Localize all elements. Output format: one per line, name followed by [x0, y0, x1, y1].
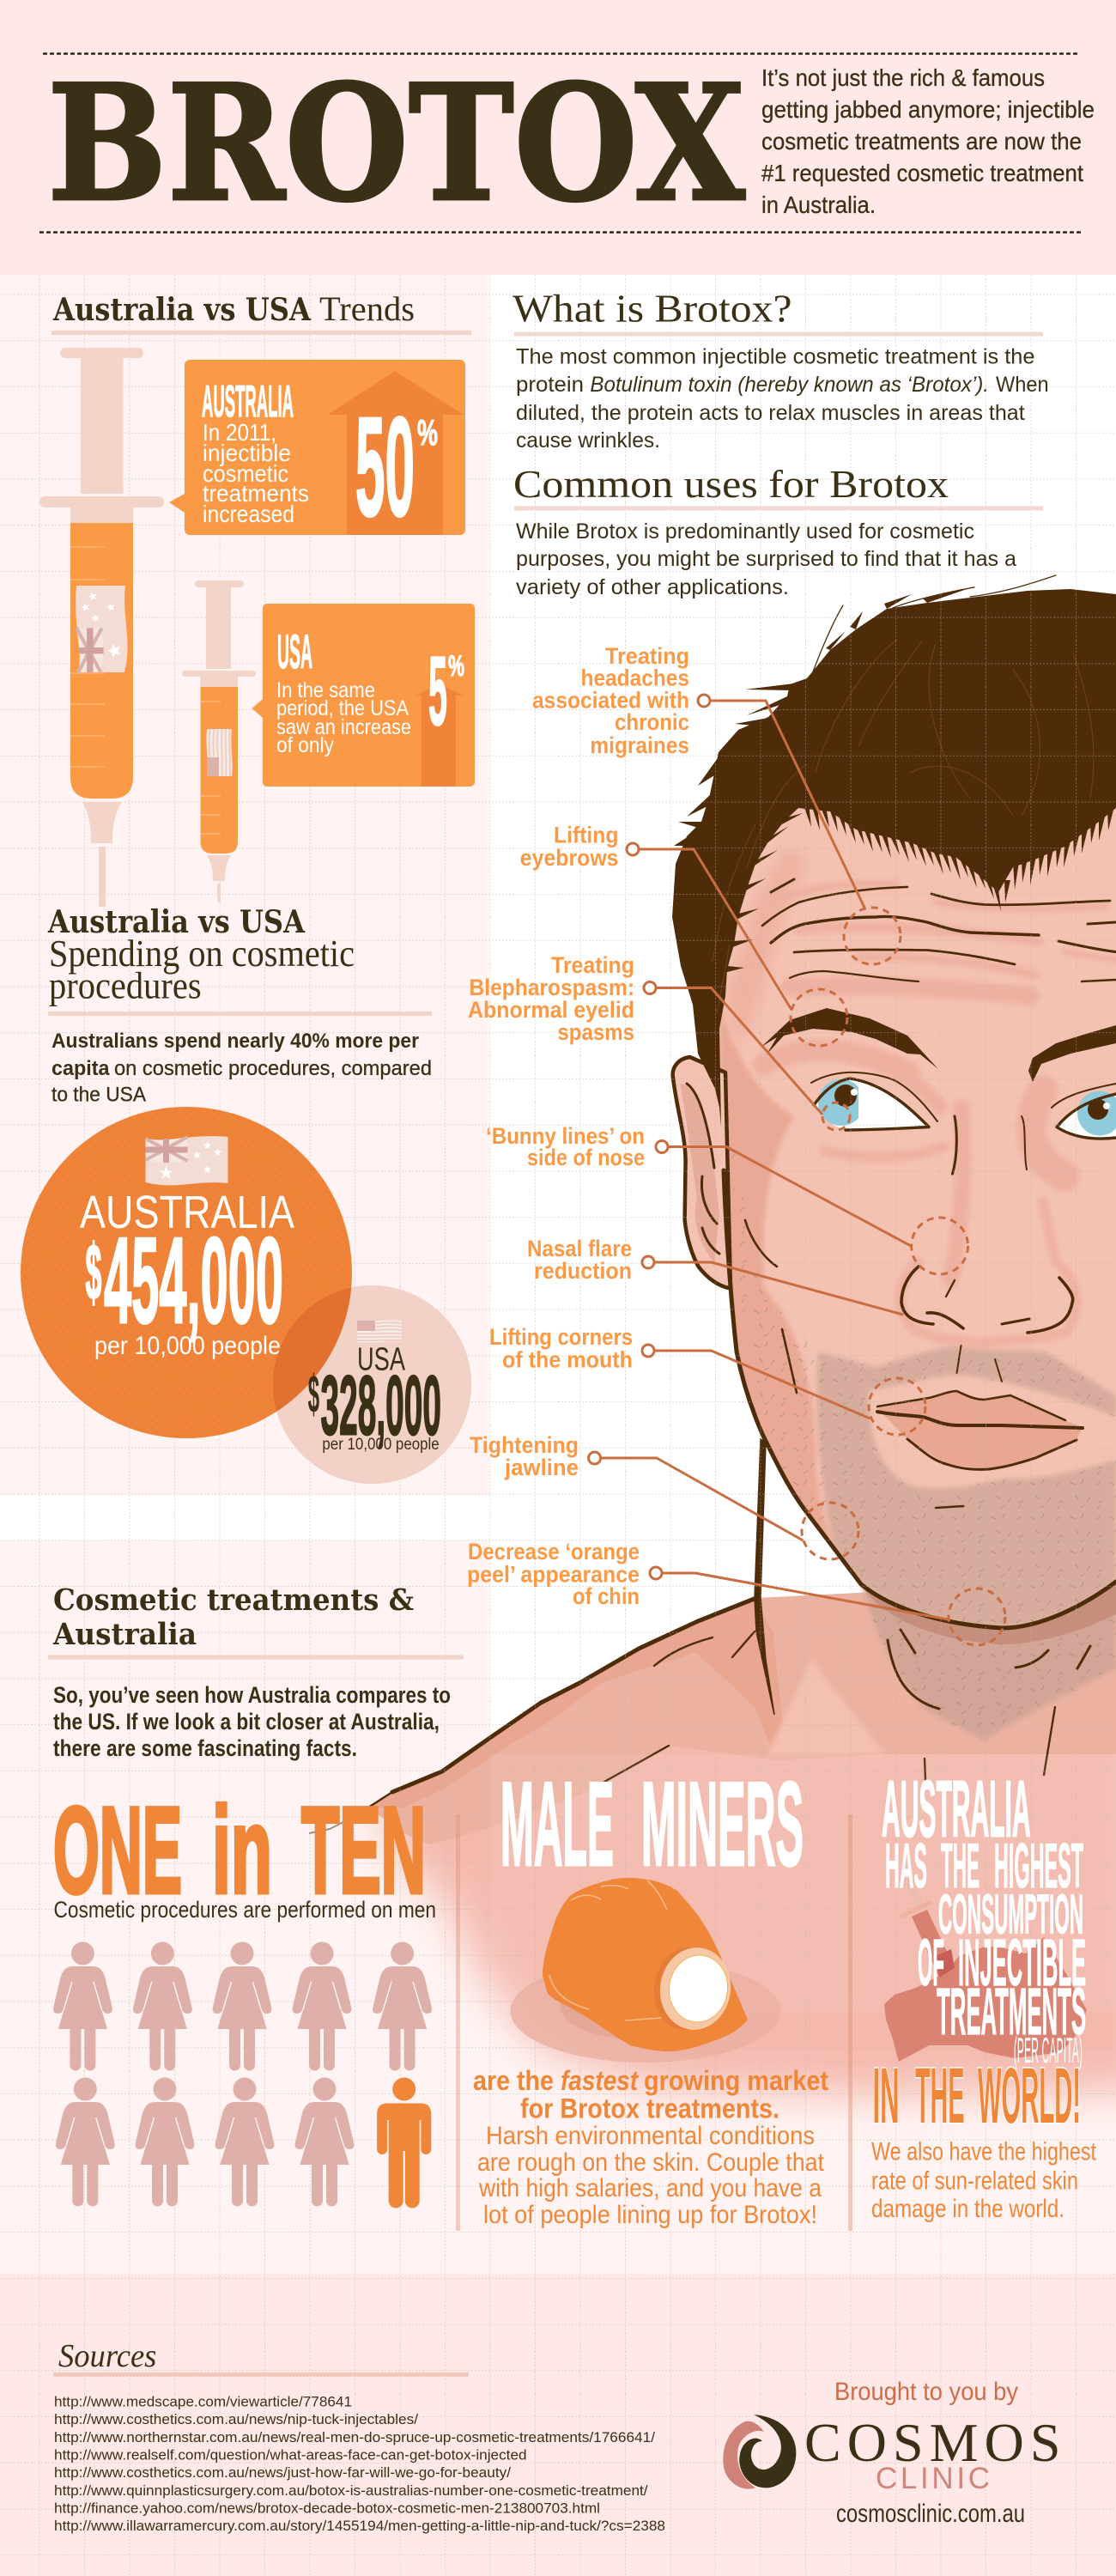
callout: bunny lines: side of nose	[527, 1145, 645, 1170]
paragraph: purposes, you might be surprised to find that it has a	[516, 547, 1016, 571]
heading: Spending on cosmetic procedures	[47, 904, 432, 1016]
heading: Common uses for Brotox	[513, 462, 949, 506]
source list: http://www.costhetics.com.au/news/nip-tuck-injectables/	[54, 2411, 418, 2427]
footer: sponsor logo: Brought to you by	[834, 2378, 1018, 2406]
label: Australia: per 10,000 people	[94, 1332, 281, 1360]
title: BROTOX	[47, 49, 746, 237]
label: USA: $	[308, 1365, 319, 1425]
label: USA: per 10,000 people	[322, 1436, 440, 1454]
heading: Spending on cosmetic procedures: procedures	[49, 965, 202, 1007]
bubble chart: Australia vs USA spending: 454,000	[104, 1212, 283, 1349]
text: per capita spending: on cosmetic procedures, compared	[114, 1057, 432, 1080]
callout: blepharospasm: spasms	[557, 1019, 634, 1045]
paragraph: diluted, the protein acts to relax muscles in areas that	[516, 401, 1025, 425]
panel: male miners: with high salaries, and you have a	[478, 2174, 822, 2202]
heading: Cosmetic treatments & Australia: Australia	[52, 1617, 197, 1652]
footer: sources	[53, 2338, 665, 2534]
jaw shadow	[861, 1582, 1116, 1644]
stat: one in ten: in	[212, 1783, 272, 1919]
paragraph	[516, 345, 1049, 453]
text	[871, 2138, 1097, 2223]
text: fastest	[561, 2065, 639, 2096]
flag: Australia	[146, 1136, 228, 1185]
callout: bunny lines	[486, 1123, 968, 1274]
callout: jawline	[470, 1432, 858, 1559]
text: per capita spending: capita	[52, 1057, 110, 1080]
label: USA: USA	[357, 1341, 405, 1377]
callout: chin: Decrease ‘orange	[468, 1539, 640, 1564]
headline: THE	[915, 2052, 965, 2140]
paragraph: cause wrinkles.	[516, 428, 660, 453]
callout: Australia 50%: %	[417, 412, 438, 453]
label: Australia: $	[86, 1229, 101, 1316]
syringe: Australia	[39, 348, 164, 907]
callout: eyebrows: eyebrows	[520, 845, 618, 871]
footer: sponsor logo: COSMOS	[804, 2412, 1061, 2473]
panel: male miners: lot of people lining up for Brotox!	[483, 2201, 817, 2229]
callout: Australia 50%: 50	[355, 388, 415, 545]
source list: http://www.costhetics.com.au/news/just-how-far-will-we-go-for-beauty/	[54, 2464, 511, 2481]
paragraph: variety of other applications.	[516, 575, 789, 599]
icon: miner helmet	[510, 1878, 781, 2063]
callout: USA 5%: USA	[277, 624, 312, 678]
headline: THE	[941, 1832, 980, 1901]
source list: http://www.illawarramercury.com.au/story/1455194/men-getting-a-little-nip-and-tuck/?cs=2388	[54, 2518, 665, 2534]
text	[473, 2065, 828, 2124]
callout: corners of the mouth: Lifting corners	[489, 1324, 633, 1350]
right eye	[1057, 1094, 1116, 1139]
callout: eyebrows	[520, 823, 847, 1046]
text: MINERS	[641, 1758, 804, 1891]
intro text	[761, 64, 1095, 218]
footer: sponsor logo: cosmosclinic.com.au	[836, 2500, 1025, 2528]
source list: http://www.medscape.com/viewarticle/778641	[54, 2394, 352, 2410]
text: intro to Australia facts: So, you’ve seen how Australia compares to	[53, 1682, 451, 1708]
beard	[817, 1346, 1116, 1628]
section: Common uses for Brotox	[513, 462, 1043, 599]
chest lower tint	[489, 1754, 1116, 2012]
callout: Australia 50%: In 2011,	[203, 419, 276, 446]
shoulder shadow	[368, 1600, 785, 1807]
paragraph	[516, 519, 1016, 599]
callout: nasal flare: Nasal flare	[527, 1236, 632, 1261]
mouth	[877, 1391, 1083, 1469]
panel: male miners: Harsh environmental conditions	[486, 2122, 815, 2150]
illustration: man's face	[309, 575, 1116, 2095]
heading: Cosmetic treatments & Australia	[48, 1583, 464, 1659]
paragraph: The most common injectible cosmetic treatment is the	[516, 345, 1035, 369]
headline	[872, 1764, 1086, 2140]
callout: headaches	[532, 643, 901, 964]
callout: USA 5%: period, the USA	[276, 696, 409, 720]
callout: nasal flare: reduction	[534, 1258, 632, 1284]
paragraph: While Brotox is predominantly used for cosmetic	[516, 519, 974, 544]
eyebrows	[761, 1008, 938, 1069]
source list	[54, 2394, 665, 2534]
pictogram: nine women and one man	[53, 1942, 432, 2208]
source list: http://finance.yahoo.com/news/brotox-decade-botox-cosmetic-men-213800703.html	[54, 2500, 600, 2517]
divider left	[456, 1814, 460, 2231]
headline: IN	[872, 2052, 900, 2140]
intro text: getting jabbed anymore; injectible	[761, 96, 1095, 123]
text: intro to Australia facts: there are some fascinating facts.	[53, 1735, 357, 1761]
callout: USA 5%	[252, 604, 475, 787]
label: Australia	[80, 1187, 294, 1360]
jaw outline	[724, 1170, 1116, 1628]
callout: jawline: jawline	[504, 1455, 579, 1480]
text: per capita spending	[52, 1030, 432, 1106]
callout: headaches: headaches	[580, 665, 689, 691]
callout: blepharospasm	[468, 952, 850, 1130]
panel: male miners	[473, 1758, 828, 2229]
intro text: cosmetic treatments are now the	[761, 128, 1082, 155]
header: title panel	[39, 49, 1095, 237]
map: Australia	[884, 1937, 1087, 2062]
callout: headaches: migraines	[590, 732, 689, 758]
ear	[673, 1057, 731, 1289]
flag: USA	[357, 1320, 402, 1343]
text: 328,000	[321, 1358, 441, 1453]
callout: corners of the mouth: of the mouth	[502, 1346, 633, 1372]
heading: Cosmetic treatments & Australia: Cosmetic treatments &	[53, 1583, 414, 1618]
text: intro to Australia facts: the US. If we look a bit closer at Australia,	[53, 1709, 440, 1735]
stat: one in ten: TEN	[301, 1783, 426, 1919]
callout: USA 5%: %	[448, 650, 464, 683]
source list: http://www.northernstar.com.au/news/real-men-do-spruce-up-cosmetic-treatments/1766641/	[54, 2429, 655, 2445]
flag: USA on syringe	[206, 729, 233, 776]
text: per capita spending: Australians spend nearly 40% more per	[52, 1030, 419, 1053]
panel: highest consumption	[871, 1764, 1097, 2223]
heading: Sources	[58, 2338, 156, 2374]
callout: USA 5%: 5	[428, 637, 447, 746]
text: intro to Australia facts	[53, 1682, 451, 1761]
label: Australia: AUSTRALIA	[80, 1187, 294, 1238]
icon: cosmos swirl	[723, 2415, 796, 2489]
callout: USA 5%: In the same	[276, 678, 375, 702]
callout: Australia 50%: AUSTRALIA	[202, 377, 294, 427]
paragraph: Botulinum toxin (hereby known as ‘Brotox’).	[590, 373, 989, 397]
footer: sponsor logo: CLINIC	[876, 2462, 990, 2495]
divider right	[848, 1814, 852, 2231]
paragraph: When	[996, 373, 1049, 397]
callout: chin: of chin	[573, 1583, 640, 1609]
forehead wrinkle shading	[764, 884, 1116, 1344]
heading: Spending on cosmetic procedures: Spending on cosmetic	[49, 933, 355, 975]
neck beard	[861, 1582, 1116, 1741]
nose shading	[901, 1262, 1077, 1344]
heading: Australia vs USA Trends: Trends	[319, 289, 415, 328]
callout: chin	[467, 1539, 1005, 1645]
face and neck lines	[745, 1220, 963, 1508]
syringe: USA	[182, 580, 256, 902]
intro text: #1 requested cosmetic treatment	[761, 160, 1083, 186]
dashed rule top	[43, 52, 1080, 55]
label: USA	[308, 1341, 441, 1454]
section: What is Brotox	[513, 287, 1049, 453]
stat: one in ten: Cosmetic procedures are performed on men	[53, 1897, 436, 1923]
hair	[672, 589, 1116, 1127]
callout: headaches: chronic	[615, 709, 689, 735]
intro text: in Australia.	[761, 191, 876, 218]
headline: HAS	[885, 1832, 927, 1901]
callout: headaches: Treating	[605, 643, 689, 669]
paragraph: protein	[516, 373, 584, 397]
head skin	[717, 773, 1116, 1628]
icon: syringe over map	[901, 1874, 955, 1978]
text: for Brotox treatments.	[520, 2093, 779, 2124]
hair spikes	[674, 586, 1113, 973]
text: damage in the world.	[871, 2195, 1064, 2223]
callout: chin: peel’ appearance	[467, 1561, 640, 1587]
bubble chart: Australia vs USA spending	[21, 1107, 471, 1484]
callout: Australia 50%: injectible	[203, 440, 291, 466]
callout: Australia 50%	[169, 360, 465, 545]
intro text: It’s not just the rich & famous	[761, 64, 1045, 91]
callout: nasal flare	[527, 1236, 903, 1315]
callout: blepharospasm: Abnormal eyelid	[468, 997, 634, 1023]
shoulder line	[392, 1598, 756, 1792]
neck highlight	[767, 1660, 885, 1754]
callout: blepharospasm: Treating	[551, 952, 634, 978]
text: are the	[473, 2065, 554, 2096]
hair strands	[713, 640, 1094, 1013]
face shading	[719, 846, 1116, 1628]
text: per capita spending: to the USA	[52, 1084, 146, 1106]
heading: Australia vs USA Trends	[52, 289, 471, 335]
left eye	[814, 1078, 929, 1130]
source list: http://www.quinnplasticsurgery.com.au/botox-is-australias-number-one-cosmetic-treatment/	[54, 2482, 648, 2499]
wrinkles	[762, 887, 907, 926]
chest haze	[378, 1580, 1116, 2095]
stat: one in ten: ONE	[53, 1783, 182, 1919]
callout: headaches: associated with	[532, 687, 689, 713]
callout: Australia 50%: treatments	[203, 480, 309, 507]
callout: jawline: Tightening	[470, 1432, 579, 1458]
icon: man	[377, 2078, 431, 2208]
footer: sponsor logo	[723, 2378, 1061, 2528]
stat: one in ten	[53, 1783, 436, 1923]
flag: Australia on syringe	[76, 586, 128, 672]
callout: Australia 50%: increased	[203, 501, 294, 527]
headline: OF	[918, 1926, 944, 2000]
heading: MALE	[500, 1758, 614, 1891]
callout: corners of the mouth	[489, 1324, 925, 1435]
nose	[901, 1267, 933, 1324]
callout: USA 5%: of only	[276, 733, 334, 757]
callout: eyebrows: Lifting	[554, 823, 618, 848]
callout: bunny lines: ‘Bunny lines’ on	[486, 1123, 645, 1149]
upper chest	[368, 1580, 1116, 1844]
callout: Australia 50%: cosmetic	[203, 460, 288, 487]
callout: USA 5%: saw an increase	[276, 715, 411, 739]
heading: Spending on cosmetic procedures: Australia vs USA	[47, 904, 306, 940]
callout: blepharospasm: Blepharospasm:	[469, 975, 634, 1000]
source list: http://www.realself.com/question/what-areas-face-can-get-botox-injected	[54, 2447, 527, 2464]
text: growing market	[644, 2065, 828, 2096]
heading: Australia vs USA Trends: Australia vs USA	[52, 292, 312, 328]
heading: What is Brotox?	[513, 287, 792, 330]
panel: male miners: are rough on the skin. Couple that	[477, 2148, 825, 2177]
dashed rule bottom	[39, 231, 1083, 234]
neck line	[755, 1439, 774, 1715]
